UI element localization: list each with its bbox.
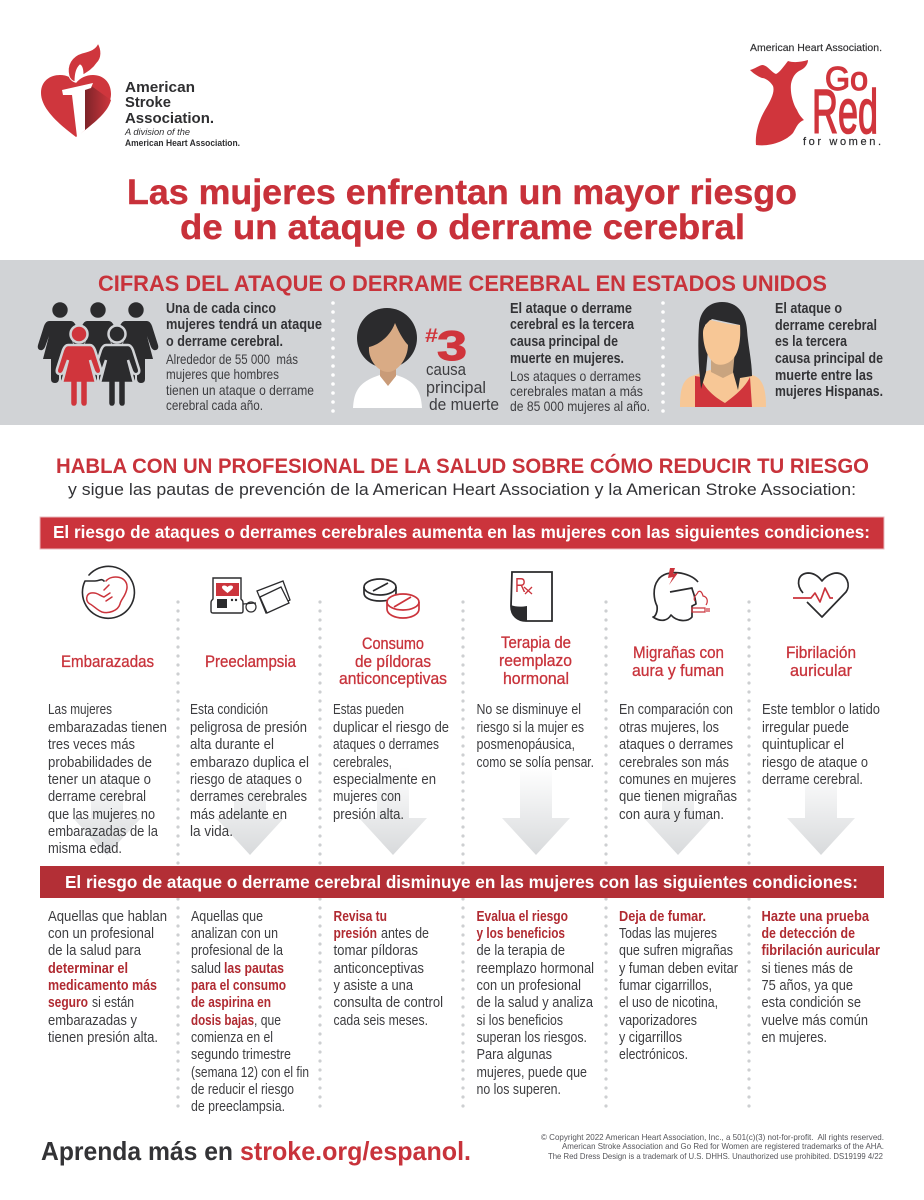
text: migraines: [619, 701, 737, 823]
#3 cause of death: causa: [426, 361, 467, 379]
heading: atrial fibrillation: Fibrilación: [786, 644, 856, 662]
advice: atrial fibrillation screening: esta condición se: [762, 994, 861, 1011]
text block: one in five: [166, 301, 322, 413]
footer: learn more: [41, 1136, 471, 1166]
advice: aspirin: , que: [254, 1012, 281, 1029]
text: pregnant: que las mujeres no: [48, 806, 155, 823]
text: pregnant: probabilidades de: [48, 754, 152, 771]
icon: prescription: [511, 572, 552, 621]
footer: learn more: Aprenda más en: [41, 1136, 233, 1166]
text: preeclampsia: más adelante en: [190, 806, 287, 823]
logo wordmark: A division of the: [124, 127, 190, 138]
column: migraines: [619, 568, 737, 823]
text block: one in five: Alrededor de 55 000 más: [166, 351, 298, 367]
logo wordmark: Association.: [125, 110, 214, 127]
text: preeclampsia: alta durante el: [190, 736, 274, 753]
text block: third leading cause: causa principal de: [510, 334, 618, 350]
advice: atrial fibrillation screening: 75 años, ya que: [762, 977, 853, 994]
advice: check blood pressure: presión: [334, 925, 377, 942]
text: atrial fibrillation: derrame cerebral.: [762, 771, 863, 788]
text block: one in five: mujeres tendrá un ataque: [166, 317, 322, 333]
advice: evaluate hormone therapy: no los superen.: [476, 1081, 561, 1098]
text: birth control pills: ataques o derrames: [333, 736, 439, 753]
advice: talk to provider: embarazadas y: [48, 1012, 137, 1029]
footer: learn more: stroke.org/espanol.: [240, 1136, 471, 1166]
heading: migraines: [632, 644, 724, 680]
footer: copyright: American Stroke Association and Go Red for Women are registered trademarks of the AHA.: [562, 1141, 884, 1151]
text: atrial fibrillation: riesgo de ataque o: [762, 754, 868, 771]
text block: one in five: tienen un ataque o derrame: [166, 382, 314, 398]
heading: birth control pills: de píldoras: [355, 653, 431, 671]
text: preeclampsia: riesgo de ataques o: [190, 771, 302, 788]
text: migraines: En comparación con: [619, 701, 733, 718]
advice: atrial fibrillation screening: Hazte una prueba: [762, 908, 870, 925]
text block: third leading cause: muerte en mujeres.: [510, 351, 624, 367]
column: birth control pills: [333, 579, 449, 823]
advice: aspirin: de reducir el riesgo: [191, 1081, 294, 1098]
advice: check blood pressure: Revisa tu: [334, 908, 387, 925]
advice: talk to provider: medicamento más: [48, 977, 157, 994]
footer: copyright: © Copyright 2022 American Heart Association, Inc., a 501(c)(3) not-for-profit. All rights reserved.: [541, 1132, 884, 1142]
advice: quit smoking: vaporizadores: [619, 1012, 697, 1029]
section heading: HABLA CON UN PROFESIONAL DE LA SALUD SOBRE CÓMO REDUCIR TU RIESGO: [56, 454, 869, 478]
text: atrial fibrillation: [762, 701, 880, 788]
logo: American Stroke Association: [41, 43, 240, 148]
text: preeclampsia: la vida.: [190, 823, 233, 840]
advice: atrial fibrillation screening: [762, 908, 880, 1046]
heading: migraines: aura y fuman: [632, 662, 724, 680]
text: pregnant: [48, 701, 167, 857]
advice: evaluate hormone therapy: con un profesional: [476, 977, 581, 994]
advice: check blood pressure: consulta de control: [334, 994, 443, 1011]
heading: atrial fibrillation: auricular: [790, 662, 852, 680]
text block: third leading cause: Los ataques o derrames: [510, 368, 641, 384]
text: atrial fibrillation: quintuplicar el: [762, 736, 844, 753]
advice: talk to provider: tienen presión alta.: [48, 1029, 158, 1046]
advice: check blood pressure: y asiste a una: [334, 977, 414, 994]
text block: Hispanic women: muerte entre las: [775, 368, 873, 384]
banner: increased risk: El riesgo de ataques o derrames cerebrales aumenta en las mujeres con las siguientes condiciones:: [53, 522, 870, 542]
icon: red dress: [750, 60, 808, 145]
heading: atrial fibrillation: [786, 644, 856, 680]
#3 cause of death: de muerte: [429, 396, 499, 414]
text: pregnant: embarazadas de la: [48, 823, 159, 840]
advice: aspirin: Aquellas que: [191, 908, 263, 925]
#3 cause of death: #: [425, 326, 439, 347]
heading: hormone therapy: Terapia de: [501, 634, 571, 652]
advice: aspirin: las pautas: [224, 960, 284, 977]
icon: pills: [364, 579, 419, 618]
text: pregnant: tres veces más: [48, 736, 135, 753]
advice: evaluate hormone therapy: Para algunas: [476, 1046, 552, 1063]
advice: quit smoking: fumar cigarrillos,: [619, 977, 712, 994]
text block: one in five: mujeres que hombres: [166, 366, 279, 382]
advice: talk to provider: seguro: [48, 994, 88, 1011]
title: de un ataque o derrame cerebral: [180, 208, 745, 247]
text block: Hispanic women: mujeres Hispanas.: [775, 384, 883, 400]
icon: heart with pulse: [793, 573, 848, 617]
advice: evaluate hormone therapy: mujeres, puede que: [476, 1064, 587, 1081]
title: Las mujeres enfrentan un mayor riesgo: [127, 173, 797, 212]
advice: aspirin: [191, 908, 309, 1115]
text block: Hispanic women: El ataque o: [775, 301, 842, 317]
text: hormone therapy: No se disminuye el: [476, 701, 581, 718]
column: atrial fibrillation: [762, 573, 880, 788]
advice: check blood pressure: antes de: [381, 925, 429, 942]
text: birth control pills: [333, 701, 449, 823]
advice: atrial fibrillation screening: fibrilación auricular: [762, 942, 880, 959]
text: preeclampsia: [190, 701, 309, 840]
advice: atrial fibrillation screening: en mujeres.: [762, 1029, 827, 1046]
#3 cause of death: principal: [426, 379, 486, 397]
advice: evaluate hormone therapy: [476, 908, 594, 1098]
banner: increased risk: [40, 517, 884, 549]
text: migraines: cerebrales son más: [619, 754, 729, 771]
text block: third leading cause: cerebral es la tercera: [510, 317, 635, 333]
advice: aspirin: profesional de la: [191, 942, 284, 959]
text block: Hispanic women: [775, 301, 883, 400]
text: hormone therapy: riesgo si la mujer es: [476, 719, 584, 736]
advice: evaluate hormone therapy: superan los riesgos.: [476, 1029, 587, 1046]
text: hormone therapy: como se solía pensar.: [476, 754, 594, 771]
text: preeclampsia: embarazo duplica el: [190, 754, 309, 771]
text block: Hispanic women: es la tercera: [775, 334, 848, 350]
advice: aspirin: analizan con un: [191, 925, 278, 942]
text: migraines: ataques o derrames: [619, 736, 733, 753]
section subheading: y sigue las pautas de prevención de la American Heart Association y la American Stroke Association:: [68, 480, 856, 499]
text: hormone therapy: [476, 701, 594, 771]
banner: reduced risk: [40, 866, 884, 898]
logo: Go Red for Women: [750, 42, 882, 148]
text: pregnant: tener un ataque o: [48, 771, 151, 788]
advice: aspirin: para el consumo: [191, 977, 286, 994]
heading: pregnant: Embarazadas: [61, 653, 154, 671]
text: migraines: que tienen migrañas: [619, 788, 737, 805]
advice: evaluate hormone therapy: si los beneficios: [476, 1012, 563, 1029]
advice: talk to provider: si están: [92, 994, 134, 1011]
text: migraines: otras mujeres, los: [619, 719, 719, 736]
advice: quit smoking: el uso de nicotina,: [619, 994, 718, 1011]
#3 cause of death: [425, 322, 499, 414]
advice: aspirin: de aspirina en: [191, 994, 271, 1011]
column: preeclampsia: [190, 578, 309, 840]
text block: one in five: o derrame cerebral.: [166, 334, 283, 350]
logo wordmark: American: [125, 79, 195, 96]
advice: talk to provider: [48, 908, 167, 1046]
advice: evaluate hormone therapy: Evalua el riesgo: [476, 908, 568, 925]
heading: hormone therapy: [499, 634, 572, 688]
heading: hormone therapy: hormonal: [503, 670, 569, 688]
icon: heart and torch: [41, 43, 111, 137]
icon: prescription: R: [515, 575, 526, 597]
text block: one in five: cerebral cada año.: [166, 397, 263, 413]
advice: quit smoking: y cigarrillos: [619, 1029, 682, 1046]
advice: atrial fibrillation screening: si tienes más de: [762, 960, 853, 977]
logo wordmark: [803, 60, 881, 148]
text block: third leading cause: [510, 301, 650, 414]
logo wordmark: [124, 79, 240, 148]
icon: woman in white blouse: [353, 308, 422, 408]
text block: Hispanic women: causa principal de: [775, 351, 883, 367]
advice: quit smoking: y fuman deben evitar: [619, 960, 738, 977]
advice: check blood pressure: cada seis meses.: [334, 1012, 428, 1029]
footer: copyright: [541, 1132, 884, 1161]
advice: check blood pressure: tomar píldoras: [334, 942, 418, 959]
advice: aspirin: segundo trimestre: [191, 1046, 291, 1063]
text: migraines: comunes en mujeres: [619, 771, 736, 788]
advice: talk to provider: de la salud para: [48, 942, 142, 959]
advice: aspirin: comienza en el: [191, 1029, 273, 1046]
logo wordmark: Go: [825, 60, 868, 97]
text: atrial fibrillation: Este temblor o latido: [762, 701, 880, 718]
text: birth control pills: presión alta.: [333, 806, 404, 823]
text: migraines: con aura y fuman.: [619, 806, 724, 823]
logo heading: American Heart Association.: [750, 42, 882, 54]
text: birth control pills: Estas pueden: [333, 701, 404, 718]
heading: hormone therapy: reemplazo: [499, 652, 572, 670]
heading: preeclampsia: Preeclampsia: [205, 653, 297, 671]
icon: group of women: [38, 302, 158, 407]
advice: talk to provider: determinar el: [48, 960, 128, 977]
advice: talk to provider: Aquellas que hablan: [48, 908, 167, 925]
text block: third leading cause: cerebrales matan a más: [510, 383, 643, 399]
advice: evaluate hormone therapy: reemplazo hormonal: [476, 960, 594, 977]
footer: copyright: The Red Dress Design is a trademark of U.S. DHHS. Unauthorized use prohibited. DS19199 4/22: [548, 1151, 883, 1161]
advice: quit smoking: Deja de fumar.: [619, 908, 706, 925]
advice: check blood pressure: anticonceptivas: [334, 960, 424, 977]
text: preeclampsia: Esta condición: [190, 701, 268, 718]
logo wordmark: Stroke: [125, 94, 171, 111]
advice: atrial fibrillation screening: vuelve más común: [762, 1012, 868, 1029]
icon: embryo: [82, 566, 134, 618]
advice: evaluate hormone therapy: y los beneficios: [476, 925, 565, 942]
advice: aspirin: salud: [191, 960, 221, 977]
text block: one in five: Una de cada cinco: [166, 301, 276, 317]
panel: stroke statistics: [0, 260, 924, 425]
arrows pointing down: [73, 767, 855, 855]
advice: aspirin: dosis bajas: [191, 1012, 254, 1029]
advice: quit smoking: electrónicos.: [619, 1046, 688, 1063]
advice: check blood pressure: [334, 908, 443, 1029]
#3 cause of death: 3: [437, 322, 467, 369]
heading: birth control pills: anticonceptivas: [339, 670, 447, 688]
column: hormone therapy: [476, 572, 594, 771]
text: preeclampsia: peligrosa de presión: [190, 719, 307, 736]
text: pregnant: derrame cerebral: [48, 788, 146, 805]
text: birth control pills: mujeres con: [333, 788, 401, 805]
text: hormone therapy: posmenopáusica,: [476, 736, 575, 753]
heading: birth control pills: Consumo: [362, 635, 424, 653]
heading: migraines: Migrañas con: [633, 644, 724, 662]
text: atrial fibrillation: irregular puede: [762, 719, 849, 736]
text: pregnant: Las mujeres: [48, 701, 112, 718]
text: birth control pills: cerebrales,: [333, 754, 392, 771]
advice: atrial fibrillation screening: de detección de: [762, 925, 855, 942]
text block: third leading cause: El ataque o derrame: [510, 301, 632, 317]
advice: quit smoking: [619, 908, 738, 1063]
title: [127, 173, 797, 247]
advice: evaluate hormone therapy: de la terapia de: [476, 942, 565, 959]
logo wordmark: American Heart Association.: [125, 138, 240, 148]
advice: quit smoking: Todas las mujeres: [619, 925, 717, 942]
icon: head with migraine and cigarette: [653, 568, 709, 621]
banner: reduced risk: El riesgo de ataque o derrame cerebral disminuye en las mujeres con las siguientes condiciones:: [65, 872, 858, 892]
heading: birth control pills: [339, 635, 447, 688]
logo wordmark: Red: [812, 78, 878, 147]
advice: aspirin: de preeclampsia.: [191, 1098, 285, 1115]
advice: evaluate hormone therapy: de la salud y analiza: [476, 994, 594, 1011]
advice: aspirin: (semana 12) con el fin: [191, 1064, 309, 1081]
text: pregnant: misma edad.: [48, 840, 122, 857]
text: preeclampsia: derrames cerebrales: [190, 788, 307, 805]
text block: third leading cause: de 85 000 mujeres al año.: [510, 398, 650, 414]
column: pregnant: [48, 566, 167, 857]
advice: quit smoking: que sufren migrañas: [619, 942, 733, 959]
logo wordmark: for women.: [803, 136, 881, 148]
text: birth control pills: duplicar el riesgo de: [333, 719, 449, 736]
text: birth control pills: especialmente en: [333, 771, 436, 788]
text block: Hispanic women: derrame cerebral: [775, 318, 877, 334]
statistics heading: CIFRAS DEL ATAQUE O DERRAME CEREBRAL EN ESTADOS UNIDOS: [98, 271, 827, 296]
text: pregnant: embarazadas tienen: [48, 719, 167, 736]
icon: woman in red dress: [680, 302, 766, 407]
icon: blood pressure monitor: [211, 578, 290, 613]
advice: talk to provider: con un profesional: [48, 925, 154, 942]
